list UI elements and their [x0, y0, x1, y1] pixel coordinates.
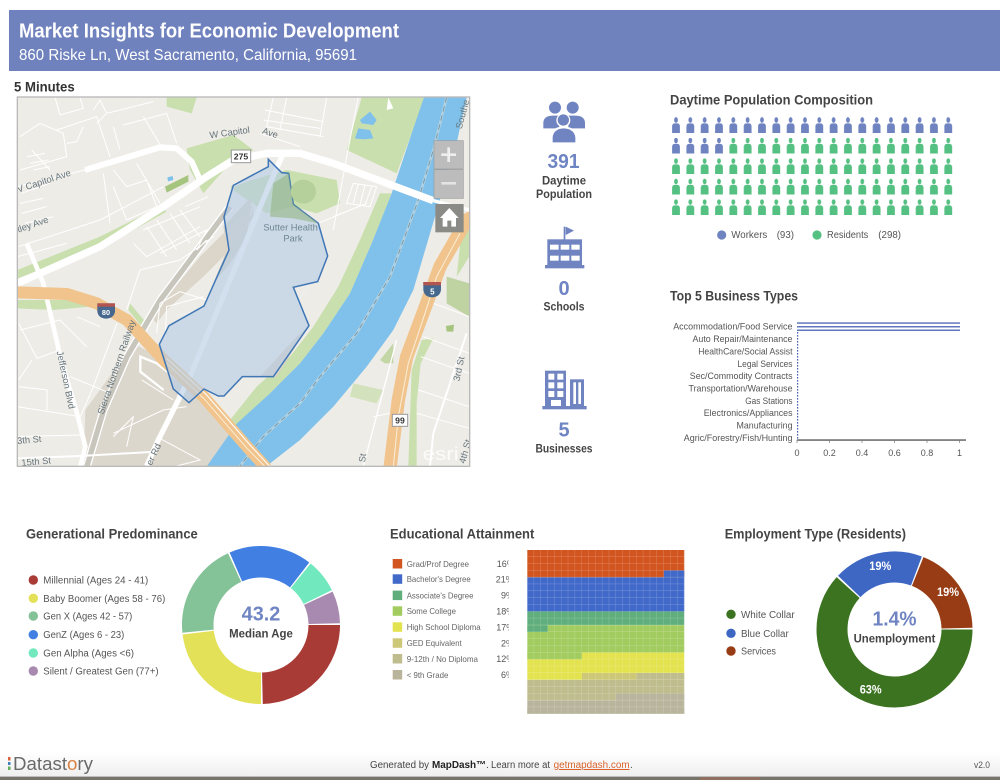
- stat: businesses: [536, 420, 593, 456]
- heading: educational attainment: Educational Attainment: [390, 526, 535, 542]
- donut centre: unemployment: 1.4%: [872, 609, 917, 631]
- logo: Datastory: Datastory: [13, 754, 93, 774]
- stat: daytime population: 391: [548, 151, 580, 173]
- rail bridge dashes: [240, 97, 447, 466]
- slice values: 63%: [860, 684, 882, 696]
- route shield 99: [392, 414, 408, 426]
- category labels: Legal Services: [738, 359, 793, 370]
- stat: businesses: Businesses: [536, 442, 593, 456]
- legend: education levels: Grad/Prof Degree: [407, 559, 469, 569]
- legend: education levels: High School Diploma: [407, 622, 481, 632]
- clipped percentages: 21%: [496, 574, 514, 584]
- legend: employment types: Blue Collar: [741, 629, 789, 640]
- legend: generations: Millennial (Ages 24 - 41): [43, 576, 148, 586]
- route shield 275: 275: [234, 151, 248, 161]
- footer credit: Generated by: [370, 760, 429, 771]
- legend: education levels: < 9th Grade: [407, 670, 449, 680]
- icon: people: [543, 102, 585, 143]
- footer credit: .: [630, 760, 633, 771]
- legend: generations: GenZ (Ages 6 - 23): [43, 630, 124, 641]
- home button: [435, 204, 464, 232]
- donut centre: median age: Median Age: [229, 626, 293, 640]
- footer credit: getmapdash.com: [554, 760, 630, 771]
- legend: generations: Gen Alpha (Ages <6): [43, 648, 134, 660]
- map labels: 4th St: [457, 438, 473, 465]
- map labels: er Rd: [144, 442, 163, 467]
- donut centre: unemployment: [854, 609, 935, 645]
- map labels: tley Ave: [16, 215, 50, 235]
- title: Market Insights for Economic Development: [19, 20, 399, 42]
- slice values: [860, 561, 959, 696]
- footer credit: Learn more at: [491, 760, 550, 771]
- W Capitol Ave road: [17, 147, 469, 466]
- tan rail land: [213, 197, 252, 283]
- bars: [797, 322, 960, 331]
- map labels: 3rd St: [452, 355, 467, 382]
- footer: [0, 752, 1000, 780]
- small pitch marks: [165, 175, 188, 193]
- clipped percentages: 12%: [496, 654, 514, 664]
- category labels: Transportation/Warehouse: [688, 384, 792, 394]
- tick labels: 0: [794, 448, 800, 458]
- header banner: [9, 10, 1000, 71]
- heading: top 5 business types: Top 5 Business Types: [670, 288, 798, 304]
- legend: generations: Gen X (Ages 42 - 57): [43, 612, 132, 622]
- route shield 80: 80: [102, 308, 110, 317]
- heading: generational predominance: Generational Predominance: [26, 526, 198, 542]
- interstate 5 / 99: [390, 217, 473, 468]
- map heading: 5 Minutes: [14, 80, 75, 94]
- route shield 5: 5: [430, 288, 435, 297]
- map labels: Sierra Northern Railway: [96, 318, 138, 416]
- stat: schools: 0: [558, 278, 570, 300]
- map labels: Ave: [261, 126, 279, 140]
- category labels: Manufacturing: [736, 421, 792, 432]
- axis: [797, 439, 966, 443]
- category labels: HealthCare/Social Assist: [698, 346, 793, 357]
- map labels: Southe: [454, 99, 471, 130]
- donut chart: employment: [806, 541, 983, 718]
- map labels: Sutter Health: [263, 223, 318, 233]
- local streets: [17, 97, 469, 466]
- map labels: [16, 99, 473, 468]
- stat: schools: Schools: [544, 300, 585, 314]
- legend: generations: [29, 575, 165, 678]
- stat: schools: [544, 278, 585, 314]
- slice values: 19%: [869, 561, 891, 573]
- legend: education levels: 9-12th / No Diploma: [407, 654, 478, 664]
- 5 minute trade area polygon: [159, 159, 328, 403]
- map labels: Park: [283, 233, 303, 243]
- pictogram chart: workers and residents: [672, 117, 958, 220]
- donut centre: median age: [229, 604, 293, 640]
- stat: daytime population: Daytime: [542, 174, 586, 188]
- tick labels: 1: [957, 448, 962, 458]
- map labels: V Capitol Ave: [16, 168, 72, 195]
- legend: workers and residents: Workers: [731, 230, 767, 241]
- route shield 80: [97, 303, 115, 319]
- legend: employment types: Services: [741, 646, 776, 658]
- interstate 80: [17, 217, 473, 468]
- legend: employment types: White Collar: [741, 610, 795, 621]
- map labels: 15th St: [21, 455, 52, 468]
- rail corridor: [87, 207, 230, 466]
- footer credit: [370, 760, 633, 771]
- clipped percentages: 2%: [501, 638, 514, 648]
- legend: education levels: Associate's Degree: [407, 590, 474, 600]
- route shield 99: 99: [395, 416, 405, 426]
- icon: school: [545, 227, 584, 268]
- route shield 275: [231, 150, 251, 163]
- tick labels: 0.6: [888, 448, 901, 458]
- stat: daytime population: Population: [536, 187, 592, 201]
- heading: employment type: Employment Type (Residents): [725, 526, 906, 542]
- legend: workers and residents: (298): [878, 230, 901, 241]
- donut chart: generations: [172, 536, 350, 714]
- map labels: W Capitol: [209, 125, 250, 140]
- donut centre: median age: 43.2: [242, 604, 280, 626]
- tick labels: 0.4: [856, 448, 868, 458]
- category labels: Accommodation/Food Service: [673, 322, 792, 333]
- streets inside trade area: [174, 182, 308, 317]
- ponds: [355, 112, 377, 139]
- clipped percentages: 18%: [496, 606, 514, 616]
- footer credit: .: [486, 760, 489, 771]
- legend: workers and residents: [717, 230, 901, 241]
- icon: buildings: [542, 371, 587, 409]
- category labels: [673, 322, 793, 444]
- parks: [347, 97, 425, 173]
- clipped percentages: 9%: [501, 591, 514, 601]
- stat: daytime population: [536, 151, 592, 201]
- clipped percentages: 16%: [497, 559, 515, 569]
- wide local roads: [17, 243, 467, 466]
- heading: daytime population composition: Daytime Population Composition: [670, 92, 873, 108]
- route shield 5: [423, 282, 441, 297]
- legend: education levels: [393, 559, 515, 680]
- legend: education levels: Bachelor's Degree: [407, 574, 471, 584]
- waffle chart: education: [527, 550, 684, 714]
- esri logo: esri: [423, 443, 459, 464]
- stat: businesses: 5: [558, 420, 570, 442]
- clipped percentages: 17%: [496, 622, 514, 632]
- zoom out button: [434, 170, 463, 198]
- category labels: Agric/Forestry/Fish/Hunting: [684, 433, 792, 444]
- tick labels: 0.8: [921, 448, 933, 458]
- footer credit: MapDash™: [432, 760, 486, 771]
- slice values: 19%: [937, 587, 959, 599]
- tick labels: [794, 448, 962, 458]
- version: v2.0: [974, 760, 990, 771]
- legend: workers and residents: Residents: [827, 230, 868, 241]
- category labels: Gas Stations: [745, 396, 793, 407]
- category labels: Sec/Commodity Contracts: [690, 371, 793, 382]
- legend: education levels: GED Equivalent: [407, 638, 462, 648]
- legend: employment types: [726, 610, 795, 658]
- category labels: Electronics/Appliances: [704, 408, 793, 419]
- tick labels: 0.2: [823, 448, 836, 458]
- map labels: St: [357, 452, 368, 463]
- river: [207, 97, 467, 466]
- map labels: 3th St: [17, 434, 42, 446]
- legend: generations: Baby Boomer (Ages 58 - 76): [43, 594, 165, 605]
- category labels: Auto Repair/Maintenance: [692, 334, 792, 345]
- legend: workers and residents: (93): [777, 230, 794, 241]
- donut centre: unemployment: Unemployment: [854, 631, 935, 645]
- legend: generations: Silent / Greatest Gen (77+): [43, 666, 159, 678]
- address subtitle: 860 Riske Ln, West Sacramento, California, 95691: [19, 47, 357, 64]
- clipped percentages: 6%: [501, 670, 514, 680]
- panel: map: [16, 97, 473, 468]
- bar chart: business types: [673, 322, 966, 458]
- legend: education levels: Some College: [407, 606, 456, 616]
- zoom in button: [434, 141, 463, 169]
- clipped percentages: [496, 560, 509, 678]
- map labels: Jefferson Blvd: [55, 350, 77, 410]
